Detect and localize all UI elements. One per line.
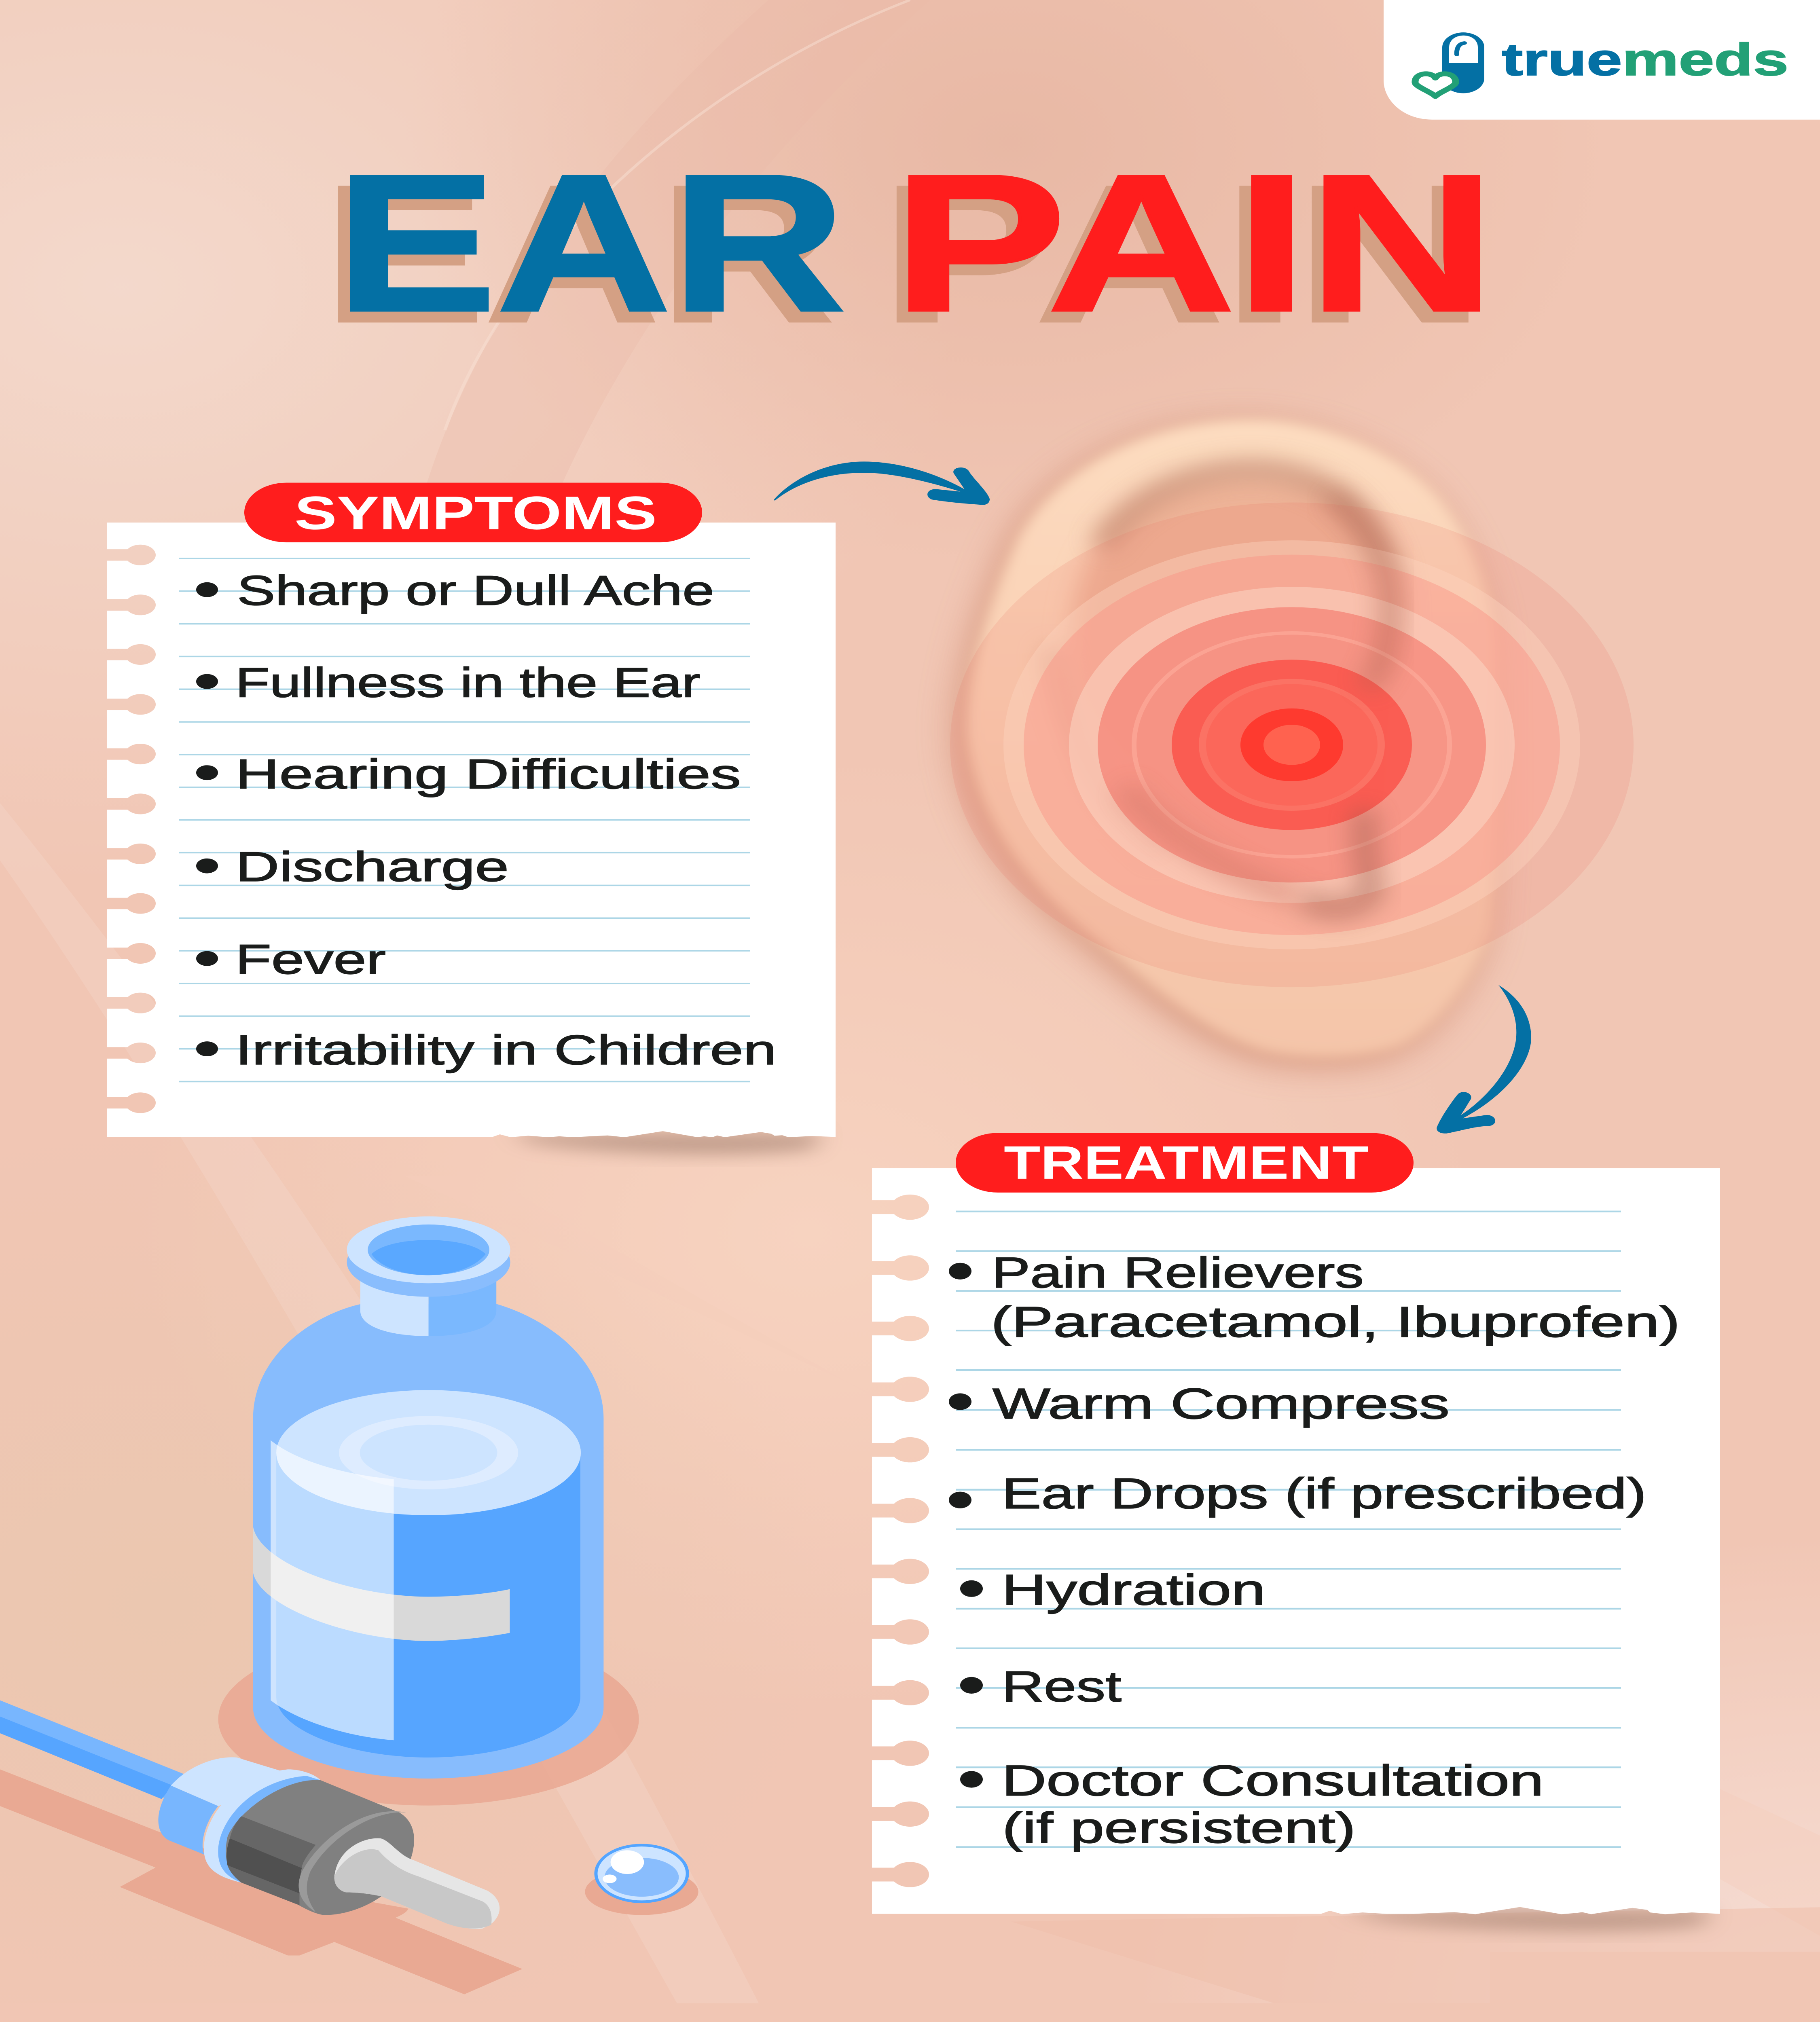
pain rings — [950, 503, 1634, 987]
bottle shadow — [218, 1633, 639, 1806]
treatment: doctor consultation — [960, 1756, 1544, 1852]
droplet — [585, 1844, 698, 1915]
treatment: warm compress: Warm Compress — [993, 1379, 1450, 1428]
panel: treatment — [872, 1133, 1720, 1931]
symptom: discharge: Discharge — [235, 843, 509, 890]
logo wordmark: truemeds — [1502, 34, 1788, 85]
panel: symptoms — [107, 483, 836, 1154]
title word: EAR: EAR — [335, 133, 846, 352]
treatment: doctor consultation: Doctor Consultation — [1002, 1756, 1544, 1805]
symptom: fever: Fever — [235, 936, 386, 983]
paper shadow — [510, 1133, 821, 1154]
title shadow: EAR — [324, 144, 834, 363]
dropper — [0, 1700, 499, 1929]
treatment: pain relievers — [949, 1248, 1680, 1346]
symptom: sharp or dull ache: Sharp or Dull Ache — [237, 567, 714, 614]
logo badge — [1384, 0, 1820, 120]
illustration: ear drops bottle, dropper and droplet — [0, 1216, 698, 1995]
title word: PAIN: PAIN — [893, 133, 1496, 352]
treatment: rest: Rest — [1002, 1662, 1122, 1711]
treatment: hydration: Hydration — [1002, 1565, 1266, 1614]
dropper shadow — [0, 1769, 523, 1995]
arrow: symptoms to ear — [773, 461, 990, 505]
heading pill: treatment: TREATMENT — [1004, 1136, 1369, 1189]
bottle — [253, 1216, 603, 1779]
treatment: ear drops: Ear Drops (if prescribed) — [1002, 1469, 1646, 1518]
paper sheet — [107, 522, 836, 1137]
ear folds showing through rings — [1125, 496, 1390, 909]
arrow: ear to treatment — [1437, 985, 1531, 1134]
illustration: ear with pain rings — [950, 419, 1634, 1064]
title — [324, 133, 1496, 363]
title shadow — [324, 144, 1484, 363]
ear — [958, 419, 1498, 1064]
symptom: irritability in children: Irritability in Children — [235, 1026, 777, 1073]
symptom: hearing difficulties: Hearing Difficulties — [235, 751, 741, 797]
paper sheet — [872, 1168, 1720, 1914]
treatment: pain relievers: (Paracetamol, Ibuprofen) — [991, 1297, 1680, 1346]
icon: capsule — [1442, 32, 1484, 93]
symptom: fullness in the ear: Fullness in the Ear — [235, 659, 700, 706]
title shadow: PAIN — [881, 144, 1484, 363]
icon: heart — [1415, 74, 1456, 96]
treatment: doctor consultation: (if persistent) — [1002, 1803, 1356, 1852]
paper shadow — [1339, 1910, 1711, 1931]
heading pill: symptoms: SYMPTOMS — [294, 487, 657, 539]
treatment: pain relievers: Pain Relievers — [992, 1248, 1364, 1297]
